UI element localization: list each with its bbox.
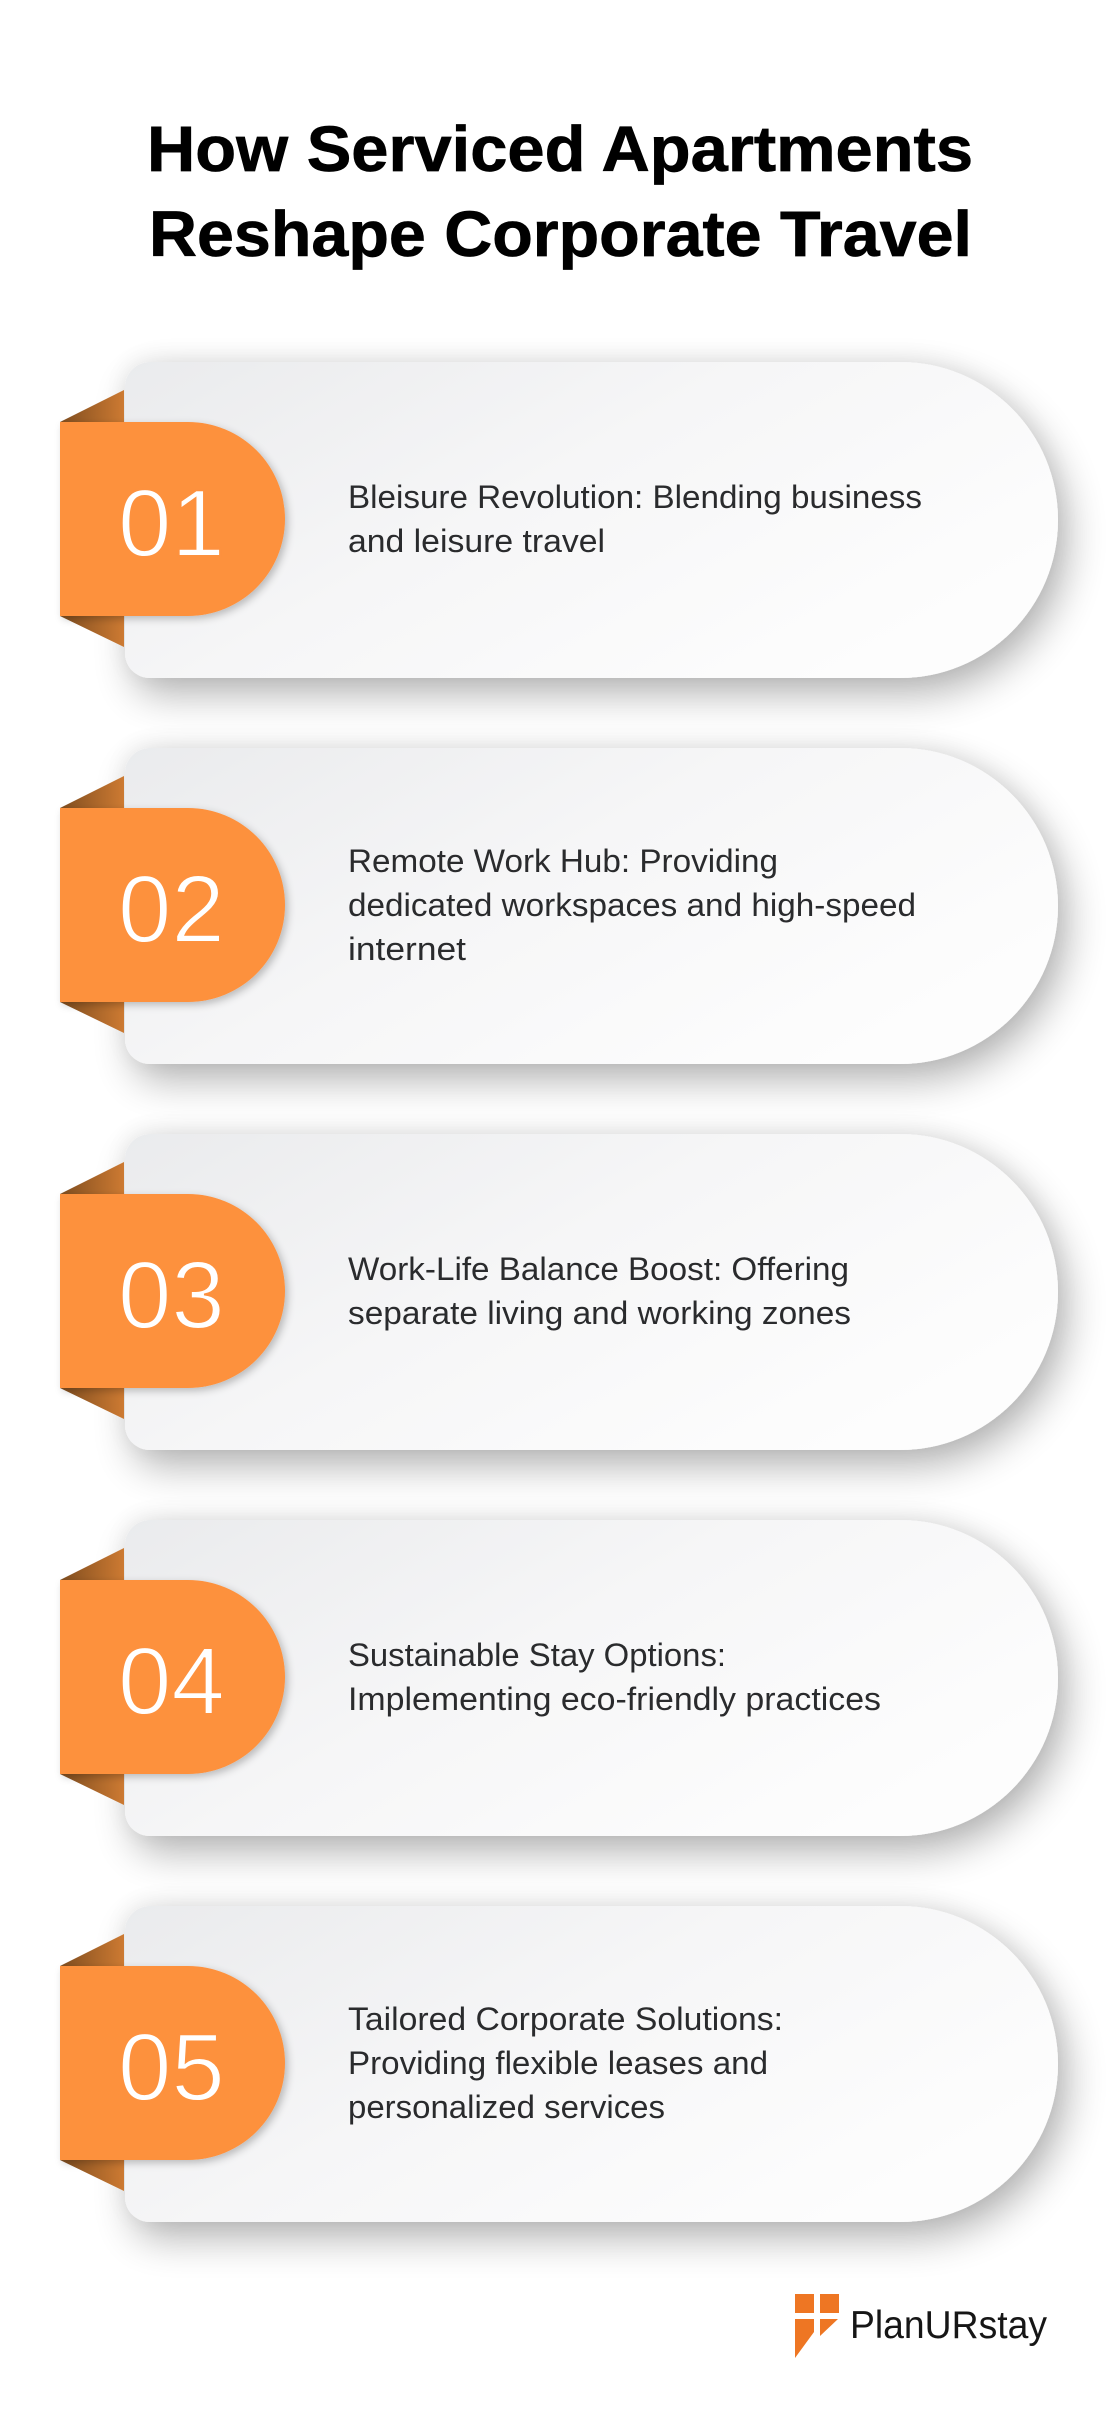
item text: Bleisure Revolution: Blending business (348, 479, 922, 515)
title: Reshape Corporate Travel (149, 198, 972, 270)
card background (125, 362, 1058, 678)
number tab (60, 808, 285, 1002)
ribbon fold bottom (60, 1002, 124, 1033)
card background (125, 1520, 1058, 1836)
panel: item 05 (60, 1906, 1058, 2222)
ribbon fold top (60, 1934, 124, 1966)
number tab (60, 422, 285, 616)
number tab (60, 1194, 285, 1388)
item text: Implementing eco-friendly practices (348, 1681, 881, 1717)
item text: and leisure travel (348, 523, 605, 559)
item text: dedicated workspaces and high-speed (348, 887, 916, 923)
card background (125, 748, 1058, 1064)
number tab (60, 1580, 285, 1774)
number: 02 (118, 856, 225, 963)
item text (348, 1637, 881, 1717)
ribbon fold bottom (60, 1388, 124, 1419)
card background (125, 1906, 1058, 2222)
item text: separate living and working zones (348, 1295, 851, 1331)
panel: item 04 (60, 1520, 1058, 1836)
item text: internet (348, 931, 466, 967)
title: How Serviced Apartments (147, 113, 973, 185)
item text (348, 2001, 783, 2125)
item text: personalized services (348, 2089, 665, 2125)
number: 03 (118, 1242, 225, 1349)
item text: Work-Life Balance Boost: Offering (348, 1251, 849, 1287)
item text (348, 843, 916, 967)
panel: item 01 (60, 362, 1058, 678)
panel: item 03 (60, 1134, 1058, 1450)
item text: Remote Work Hub: Providing (348, 843, 778, 879)
ribbon fold bottom (60, 616, 124, 647)
panel: item 02 (60, 748, 1058, 1064)
logo wordmark: PlanURstay (850, 2304, 1047, 2347)
ribbon fold top (60, 1162, 124, 1194)
ribbon fold bottom (60, 2160, 124, 2191)
title (147, 113, 973, 270)
item text (348, 1251, 851, 1331)
ribbon fold top (60, 1548, 124, 1580)
ribbon fold top (60, 390, 124, 422)
number: 01 (118, 470, 225, 577)
logo: PlanURstay (795, 2294, 1047, 2358)
ribbon fold bottom (60, 1774, 124, 1805)
item text: Providing flexible leases and (348, 2045, 768, 2081)
item text: Sustainable Stay Options: (348, 1637, 726, 1673)
item text: Tailored Corporate Solutions: (348, 2001, 783, 2037)
number: 05 (118, 2014, 225, 2121)
number tab (60, 1966, 285, 2160)
ribbon fold top (60, 776, 124, 808)
item text (348, 479, 922, 559)
icon: logo mark (795, 2294, 839, 2358)
number: 04 (118, 1628, 225, 1735)
card background (125, 1134, 1058, 1450)
